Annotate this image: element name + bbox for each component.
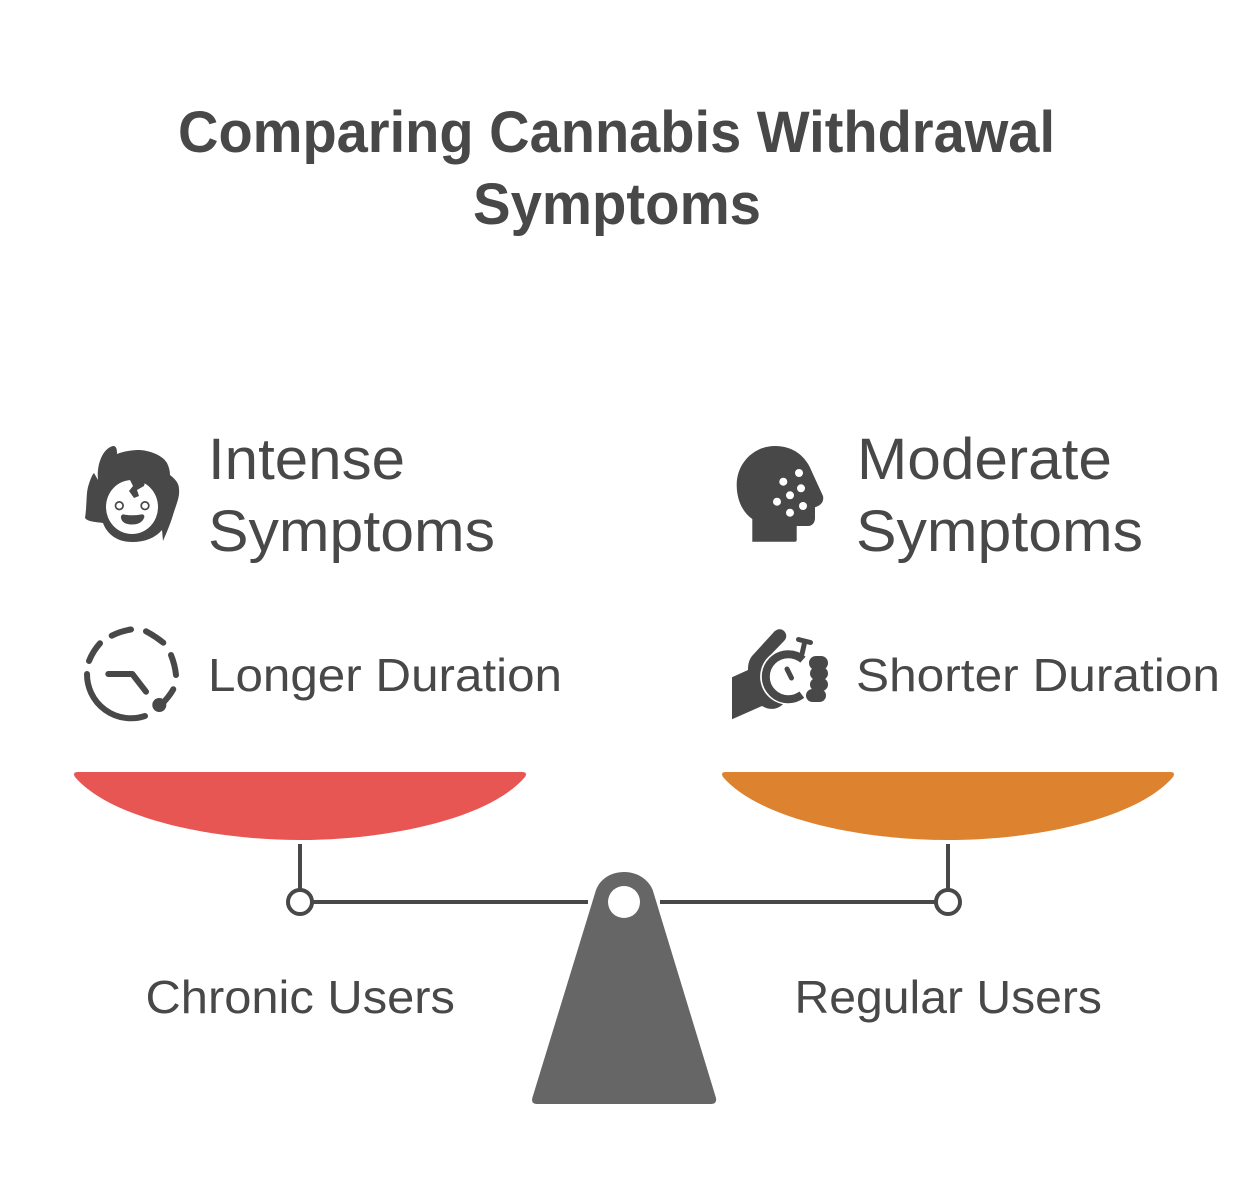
text: Intense Symptoms xyxy=(208,427,495,564)
left pan xyxy=(74,772,526,840)
label: Chronic Users: Chronic Users xyxy=(146,971,455,1023)
text: Intense Symptoms: Intense xyxy=(208,427,405,492)
icon: dashed clock xyxy=(87,630,176,718)
text: Intense Symptoms: Symptoms xyxy=(208,499,495,564)
text: Moderate Symptoms: Moderate xyxy=(857,427,1112,492)
text: Longer Duration: Longer Duration xyxy=(208,649,562,701)
scale beam xyxy=(288,844,960,914)
text: Moderate Symptoms xyxy=(856,427,1143,564)
label: Regular Users: Regular Users xyxy=(794,971,1102,1023)
icon: woman's head with crack xyxy=(85,446,179,542)
right pan xyxy=(722,772,1174,840)
text: Shorter Duration: Shorter Duration xyxy=(856,649,1220,701)
text: Moderate Symptoms: Symptoms xyxy=(856,499,1143,564)
icon: hand holding stopwatch xyxy=(732,629,828,719)
icon: head with skin spots xyxy=(737,446,823,542)
title xyxy=(178,100,1055,237)
fulcrum xyxy=(532,872,716,1104)
title: Symptoms xyxy=(473,172,761,237)
title: Comparing Cannabis Withdrawal xyxy=(178,100,1055,165)
